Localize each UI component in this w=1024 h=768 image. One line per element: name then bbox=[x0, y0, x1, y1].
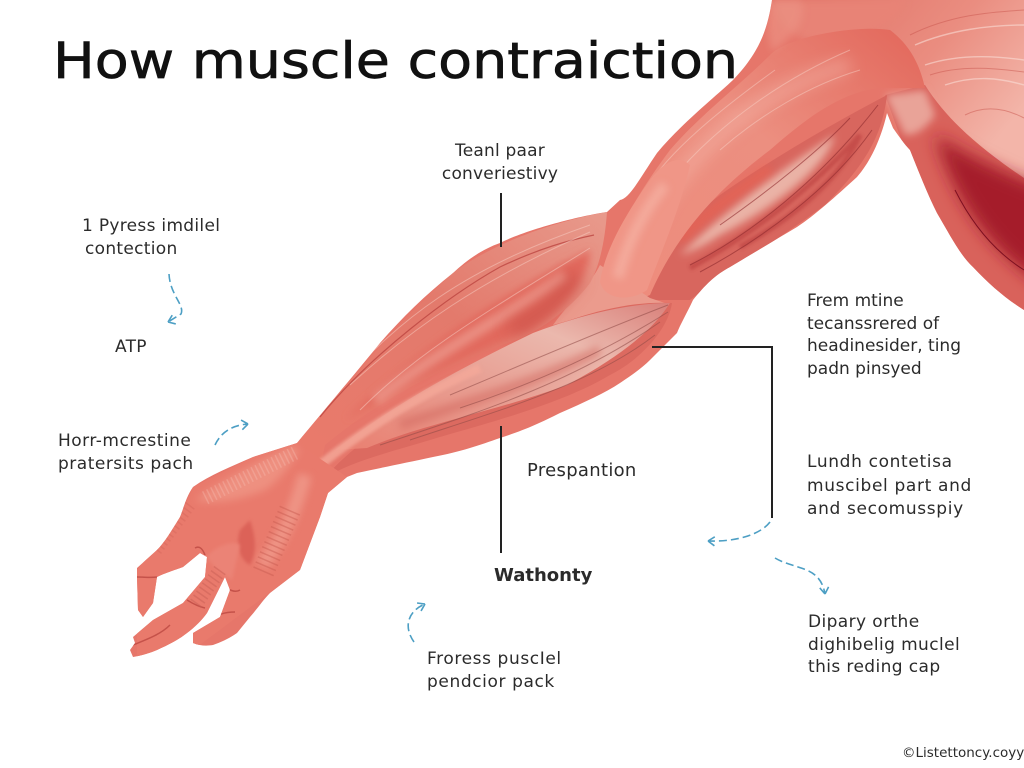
label: middle left: pratersits pach bbox=[58, 454, 194, 474]
dashed arrow: ATP bbox=[168, 274, 182, 324]
muscular arm illustration bbox=[130, 0, 1024, 657]
label: top bbox=[442, 141, 558, 184]
label: upper right: padn pinsyed bbox=[807, 358, 922, 378]
tendon finger bbox=[604, 162, 688, 292]
upper arm lower muscle bbox=[640, 95, 887, 300]
label: upper right: Frem mtine bbox=[807, 291, 904, 311]
label: bottom: pendcior pack bbox=[427, 672, 555, 692]
title: How muscle contraiction bbox=[53, 32, 738, 90]
label: middle right: muscibel part and bbox=[807, 476, 972, 496]
forearm lower muscle bbox=[320, 303, 672, 478]
leader line: right label bbox=[652, 347, 772, 518]
chest muscle bbox=[796, 0, 1024, 310]
label: middle right: Lundh contetisa bbox=[807, 452, 953, 472]
label: lower right: this reding cap bbox=[808, 657, 941, 677]
leader line: top label bbox=[500, 193, 502, 247]
label: middle left: Horr-mcrestine bbox=[58, 431, 191, 451]
label: bottom bbox=[427, 649, 562, 692]
label: ATP: ATP bbox=[115, 337, 147, 357]
label: middle left bbox=[58, 431, 194, 474]
label: Wathonty: Wathonty bbox=[494, 565, 592, 586]
label: upper right: headinesider, ting bbox=[807, 336, 961, 356]
label: upper left: 1 Pyress imdilel bbox=[82, 216, 220, 236]
label: lower right bbox=[808, 612, 960, 677]
elbow light patch bbox=[553, 265, 665, 325]
label: Prespantion: Prespantion bbox=[527, 460, 637, 481]
dashed arrow: lower right 1 bbox=[708, 522, 770, 547]
upper arm band bbox=[636, 0, 924, 296]
dashed arrow: bottom bbox=[408, 603, 425, 642]
label: middle right: and secomusspiy bbox=[807, 499, 964, 519]
label: top: Teanl paar bbox=[455, 141, 545, 161]
label: upper left: contection bbox=[85, 239, 178, 259]
hand bbox=[133, 443, 347, 660]
label: bottom: Froress puscIel bbox=[427, 649, 562, 669]
label: upper right: tecanssrered of bbox=[807, 314, 939, 334]
label: top: converiestivy bbox=[442, 164, 558, 184]
leader line: bottom label bbox=[500, 426, 502, 553]
label: upper right bbox=[807, 291, 961, 378]
label: lower right: dighibelig muclel bbox=[808, 634, 960, 654]
forearm upper muscle bbox=[297, 212, 607, 443]
label: lower right: Dipary orthe bbox=[808, 612, 920, 632]
dashed arrow: left middle bbox=[215, 420, 248, 445]
credit: ©Listettoncy.coyy bbox=[902, 745, 1024, 761]
label: upper left bbox=[82, 216, 220, 259]
dashed arrow: lower right 2 bbox=[775, 558, 829, 594]
label: middle right bbox=[807, 452, 972, 519]
